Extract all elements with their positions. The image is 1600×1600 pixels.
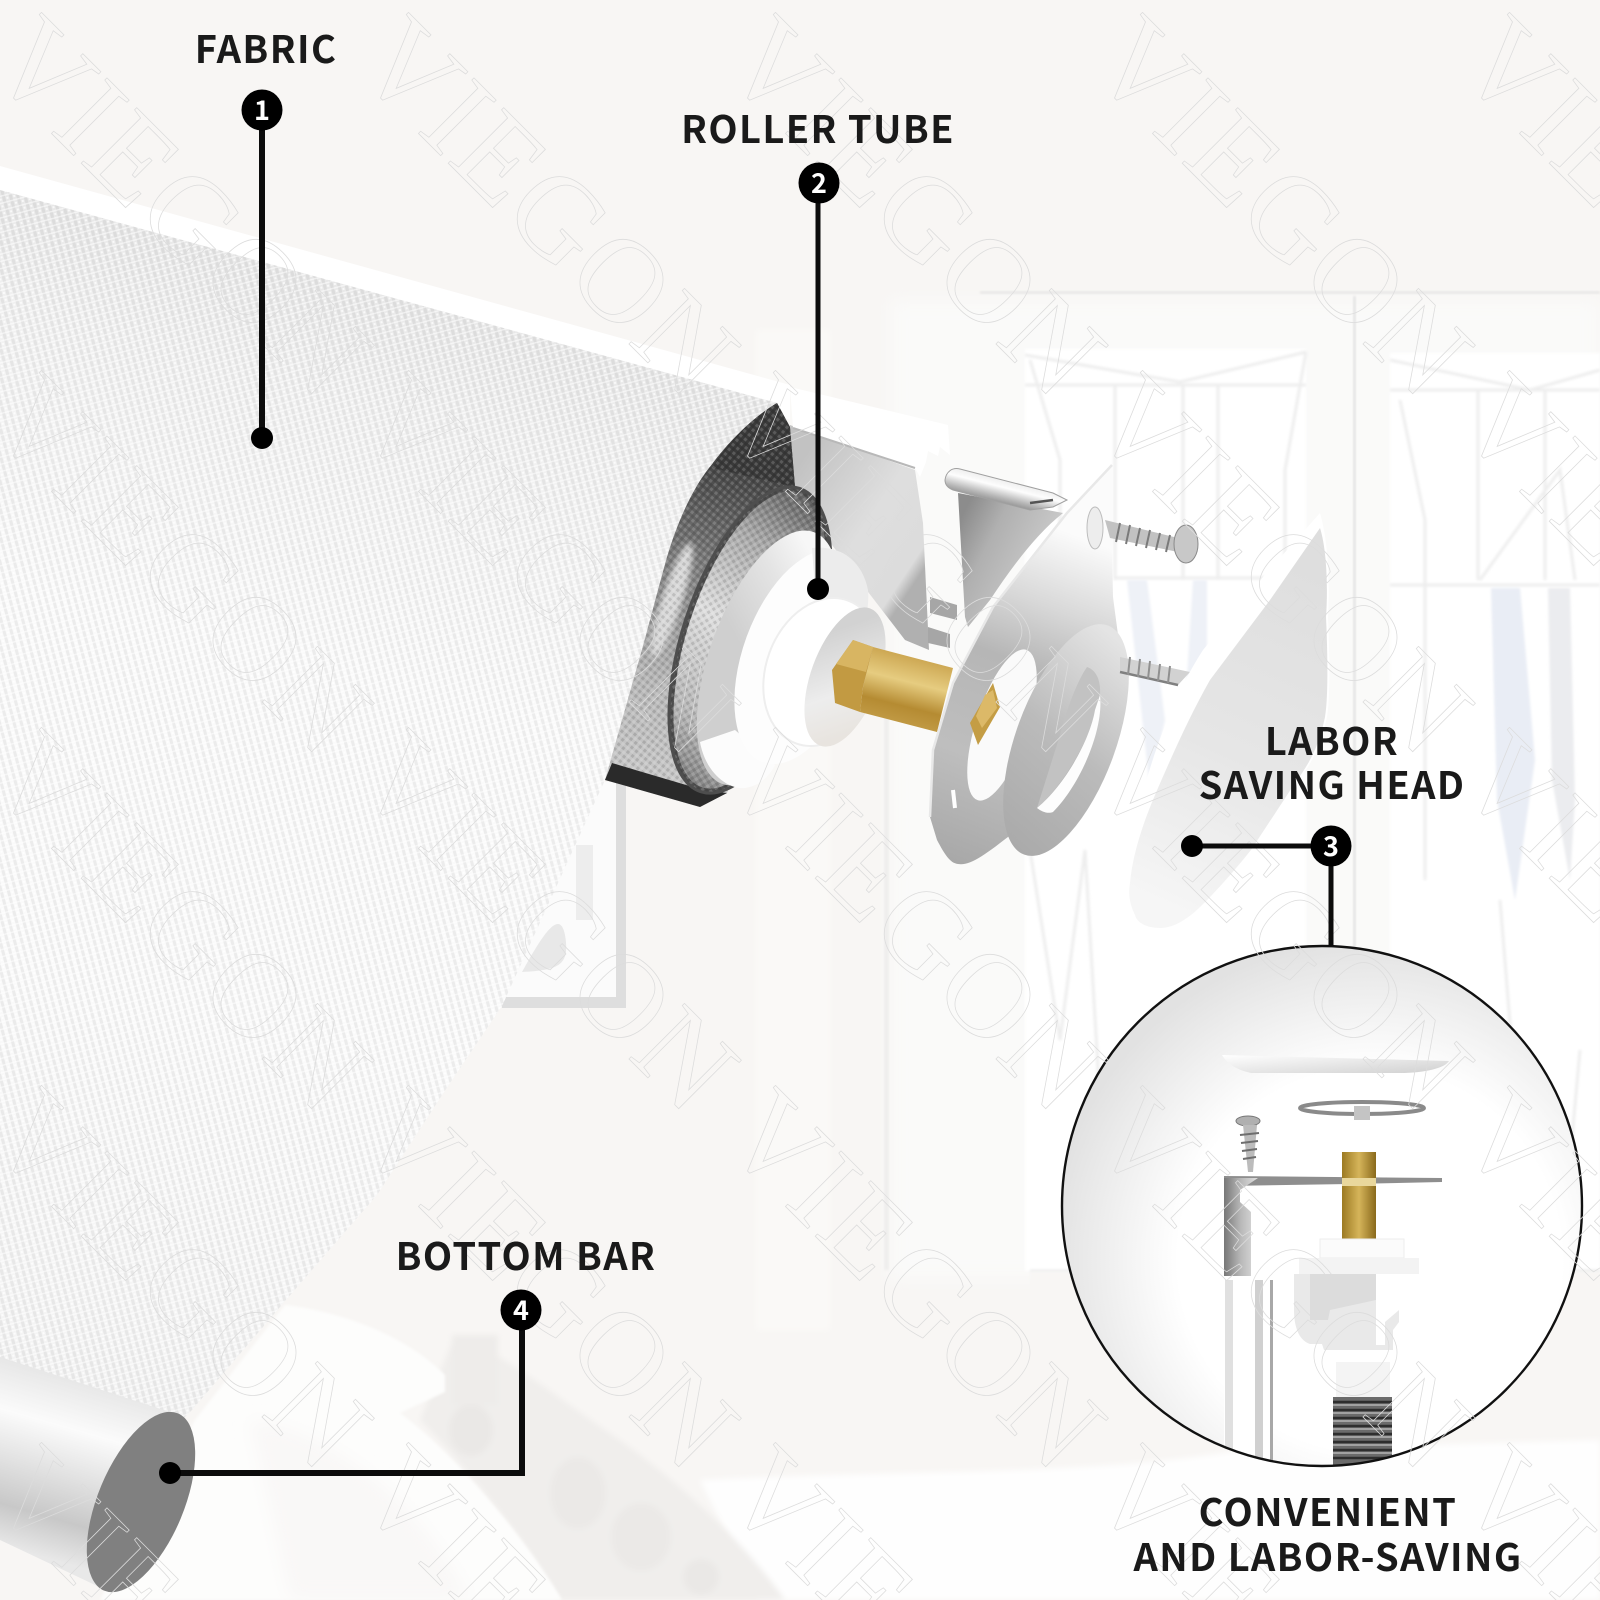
- wall picture frame: [502, 782, 626, 1008]
- mounting bracket: [930, 465, 1120, 864]
- callout 1: fabric: 1: [254, 89, 270, 128]
- callout 2: roller tube: [681, 99, 955, 600]
- white pillows: [100, 1305, 562, 1600]
- watermark VIEGON grid: VIEGON: [334, 706, 766, 1138]
- plate side view: [1224, 1176, 1442, 1186]
- bed sheet: [700, 1440, 1600, 1600]
- brass shaft side view: [1342, 1152, 1376, 1239]
- watermark VIEGON grid: VIEGON: [1068, 1064, 1500, 1496]
- watermark VIEGON grid: VIEGON: [334, 0, 766, 423]
- callout 4: bottom bar: 4: [513, 1289, 529, 1328]
- lower screw: [1120, 657, 1190, 685]
- callout 3: labor saving head: SAVING HEAD: [1199, 755, 1465, 810]
- roller tube end plug: [668, 512, 902, 804]
- watermark VIEGON grid: VIEGON: [1068, 706, 1500, 1138]
- headrail strip: [0, 166, 790, 420]
- watermark VIEGON grid: VIEGON: [701, 349, 1133, 781]
- watermark VIEGON grid: VIEGON: [1068, 0, 1500, 423]
- caption: convenient and labor-saving: AND LABOR-SAVING: [1133, 1527, 1522, 1582]
- retaining ring side view: [1300, 1102, 1424, 1120]
- retaining disc: [977, 608, 1155, 872]
- callout 3: labor saving head: LABOR: [1265, 711, 1399, 766]
- labor saving head cap: [1124, 513, 1329, 930]
- callout 4: bottom bar: BOTTOM BAR: [396, 1226, 656, 1281]
- callout 1: fabric: FABRIC: [195, 19, 337, 74]
- rail end and grey panel: [790, 387, 957, 650]
- bottom bar: [0, 1357, 218, 1600]
- caption: convenient and labor-saving: CONVENIENT: [1199, 1482, 1457, 1537]
- watermark VIEGON grid: VIEGON: [334, 349, 766, 781]
- brass hex shaft: [832, 640, 953, 732]
- callout 1: fabric: [195, 19, 337, 449]
- threaded spring: [1333, 1397, 1392, 1472]
- fabric roll: [0, 190, 777, 1500]
- watermark VIEGON grid: VIEGON: [701, 1064, 1133, 1496]
- white coupling: [1294, 1239, 1419, 1398]
- callout 3: labor saving head: 3: [1323, 825, 1339, 864]
- rail side view: [1224, 1280, 1273, 1470]
- patterned pillow: [420, 1335, 785, 1600]
- zoom circle: convenient and labor-saving detail: [1062, 946, 1582, 1472]
- shell cap side view: [1222, 1055, 1449, 1073]
- top screw: [1087, 507, 1198, 563]
- bracket side view: [1224, 1178, 1258, 1276]
- fabric roll end section: [605, 403, 862, 811]
- callout 2: roller tube: ROLLER TUBE: [681, 99, 955, 154]
- watermark VIEGON grid: VIEGON: [334, 1064, 766, 1496]
- screw side view: [1236, 1116, 1260, 1172]
- watermark VIEGON grid: VIEGON: [701, 706, 1133, 1138]
- callout 2: roller tube: 2: [811, 162, 827, 201]
- callout 3: labor saving head: [1181, 711, 1465, 946]
- caption: convenient and labor-saving: [1133, 1482, 1522, 1582]
- callout 4: bottom bar: [159, 1226, 656, 1484]
- watermark VIEGON grid: VIEGON: [1068, 349, 1500, 781]
- watermark VIEGON grid: VIEGON: [701, 0, 1133, 423]
